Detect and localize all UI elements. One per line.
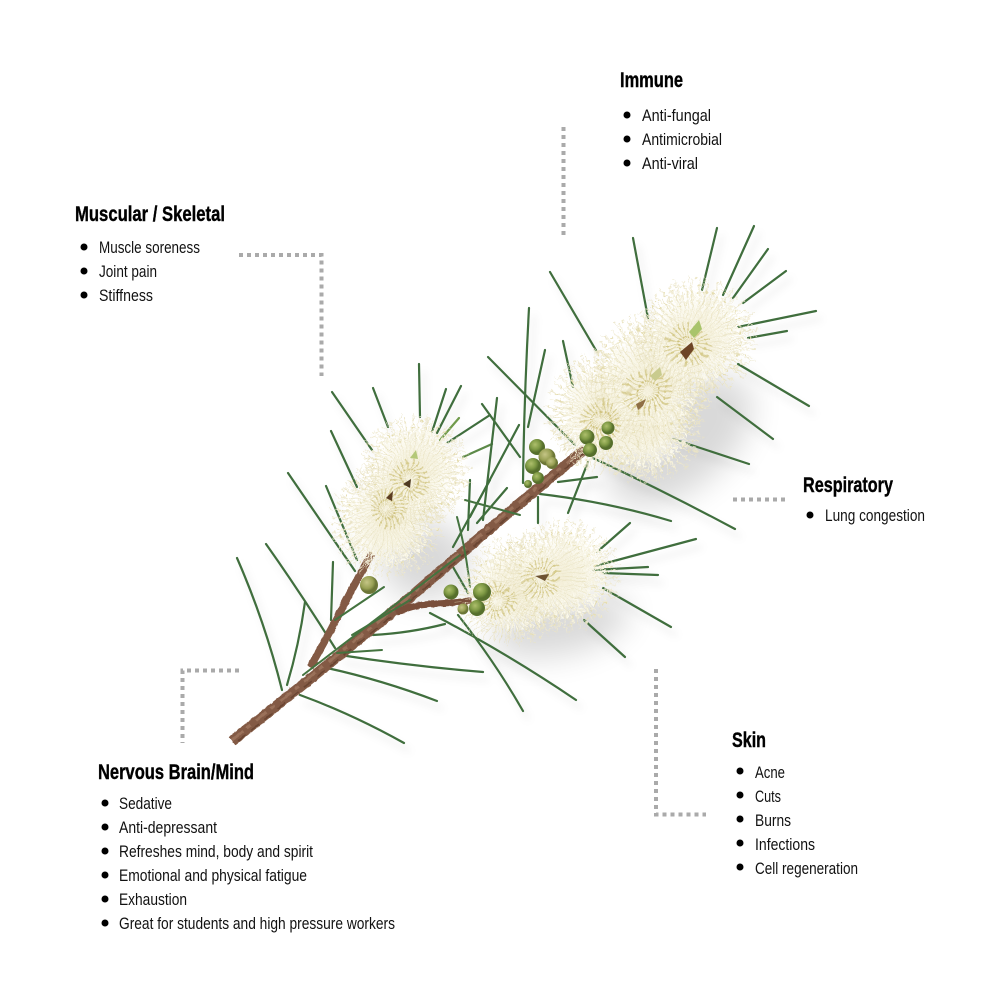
list: skin: Cuts — [755, 788, 781, 806]
panel: respiratory — [803, 473, 925, 525]
panel: nervous brain mind — [98, 760, 395, 933]
connector: immune — [562, 127, 566, 238]
soft ground shadow — [380, 349, 776, 669]
green buds — [360, 422, 614, 616]
connector: nervous — [182, 670, 239, 743]
list: immune: Antimicrobial — [642, 131, 722, 149]
tea tree branch illustration — [232, 226, 816, 743]
needles in front of the branch — [303, 500, 520, 675]
heading: nervous brain mind: Nervous Brain/Mind — [98, 760, 254, 784]
flower centres — [386, 320, 702, 581]
flower head: middle — [454, 504, 635, 652]
heading: respiratory: Respiratory — [803, 473, 893, 497]
needles behind the branch — [237, 226, 816, 743]
list: immune: Anti-viral — [642, 155, 698, 173]
list: immune: Anti-fungal — [642, 107, 711, 125]
list: nervous brain mind — [102, 795, 395, 933]
connector: skin — [656, 669, 706, 814]
list: nervous brain mind: Anti-depressant — [119, 819, 217, 837]
connector: muscular skeletal — [239, 255, 322, 376]
list: immune — [624, 107, 722, 173]
list: respiratory: Lung congestion — [825, 507, 925, 525]
connector: respiratory — [733, 498, 785, 502]
panel: muscular skeletal — [75, 202, 225, 305]
list: skin: Cell regeneration — [755, 860, 858, 878]
list: nervous brain mind: Emotional and physical fatigue — [119, 867, 307, 885]
list: skin: Burns — [755, 812, 791, 830]
heading: muscular skeletal: Muscular / Skeletal — [75, 202, 225, 226]
list: nervous brain mind: Exhaustion — [119, 891, 187, 909]
branches — [232, 448, 585, 741]
list: skin: Acne — [755, 764, 785, 782]
heading: immune: Immune — [620, 68, 683, 92]
list: nervous brain mind: Refreshes mind, body and spirit — [119, 843, 313, 861]
list: nervous brain mind: Great for students and high pressure workers — [119, 915, 395, 933]
list: muscular skeletal: Muscle soreness — [99, 239, 200, 257]
flower head: lower left — [333, 403, 482, 577]
flower head: upper right — [541, 255, 779, 503]
list: muscular skeletal: Joint pain — [99, 263, 157, 281]
list: muscular skeletal: Stiffness — [99, 287, 153, 305]
panel: immune — [620, 68, 722, 173]
panel: skin — [732, 728, 858, 878]
list: skin: Infections — [755, 836, 815, 854]
list: skin — [736, 764, 858, 878]
list: muscular skeletal — [80, 239, 200, 305]
list: nervous brain mind: Sedative — [119, 795, 172, 813]
heading: skin: Skin — [732, 728, 766, 752]
